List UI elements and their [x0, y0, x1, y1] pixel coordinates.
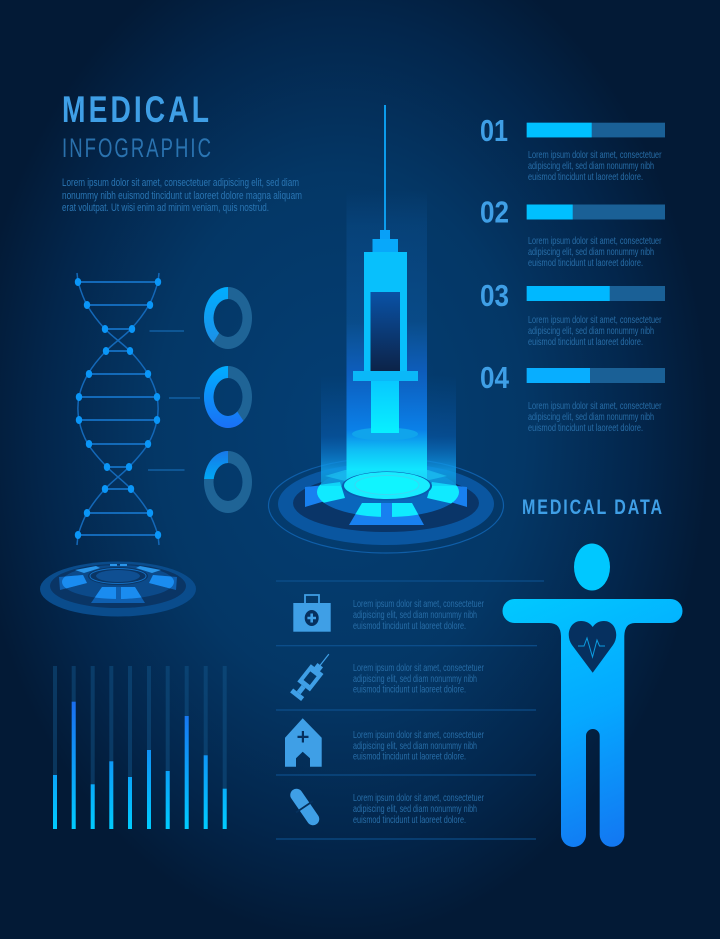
numbered list [480, 113, 665, 434]
row 4 text [353, 793, 484, 826]
plunger [371, 381, 399, 433]
row 3 text: euismod tincidunt ut laoreet dolore. [353, 752, 466, 762]
icon: first aid kit [293, 595, 331, 632]
platform core [325, 470, 447, 500]
item 03: euismod tincidunt ut laoreet dolore. [528, 337, 643, 348]
heart [569, 621, 616, 673]
row 2 text [353, 663, 484, 696]
item 02: Lorem ipsum dolor sit amet, consectetuer [528, 236, 662, 247]
item 03: 03 [480, 278, 509, 313]
needle [384, 105, 386, 231]
row 1 text [353, 599, 484, 632]
syringe window [370, 292, 400, 371]
title: INFOGRAPHIC [62, 133, 213, 163]
item 03 [480, 278, 665, 348]
title: MEDICAL [62, 89, 212, 130]
row 3 text [353, 730, 484, 762]
item 01: euismod tincidunt ut laoreet dolore. [528, 172, 643, 183]
title [62, 89, 213, 163]
human figure [502, 544, 682, 847]
item 02: adipiscing elit, sed diam nonummy nibh [528, 247, 654, 258]
syringe [352, 105, 418, 440]
row 1 text: euismod tincidunt ut laoreet dolore. [353, 621, 466, 632]
icon: syringe [289, 649, 335, 702]
item 03: Lorem ipsum dolor sit amet, consectetuer [528, 315, 662, 326]
syringe tip [380, 230, 390, 240]
main hologram platform [268, 458, 504, 553]
donut chart 3 [204, 451, 252, 513]
intro text block [62, 177, 302, 214]
item 02: euismod tincidunt ut laoreet dolore. [528, 258, 643, 269]
small hologram platform [40, 562, 196, 616]
row 2 text: Lorem ipsum dolor sit amet, consectetuer [353, 663, 484, 674]
row 4 text: Lorem ipsum dolor sit amet, consectetuer [353, 793, 484, 804]
bar chart [53, 666, 227, 829]
row 3 text: adipiscing elit, sed diam nonummy nibh [353, 741, 477, 752]
DNA connector lines [148, 331, 200, 470]
medical data heading: MEDICAL DATA [522, 496, 664, 519]
item 03: adipiscing elit, sed diam nonummy nibh [528, 326, 654, 337]
row 4 text: adipiscing elit, sed diam nonummy nibh [353, 804, 477, 815]
item 02 [480, 194, 665, 269]
head [574, 544, 610, 590]
row 1 text: Lorem ipsum dolor sit amet, consectetuer [353, 599, 484, 610]
item 04: Lorem ipsum dolor sit amet, consectetuer [528, 401, 662, 412]
row 2 text: euismod tincidunt ut laoreet dolore. [353, 684, 466, 696]
item 01: 01 [480, 113, 508, 148]
intro text block: Lorem ipsum dolor sit amet, consectetuer adipiscing elit, sed diam [62, 177, 299, 189]
icon: capsule [296, 795, 313, 819]
intro text block: erat volutpat. Ut wisi enim ad minim veniam, quis nostrud. [62, 202, 269, 214]
flange [353, 371, 418, 381]
DNA helix [75, 273, 161, 545]
item 04: euismod tincidunt ut laoreet dolore. [528, 423, 643, 434]
row 1 text: adipiscing elit, sed diam nonummy nibh [353, 610, 477, 621]
donut chart 1 [204, 287, 252, 349]
item 01 [480, 113, 665, 183]
row 4 text: euismod tincidunt ut laoreet dolore. [353, 815, 466, 826]
item 02: 02 [480, 194, 509, 229]
item 01: Lorem ipsum dolor sit amet, consectetuer [528, 150, 662, 161]
item 04 [480, 360, 665, 434]
item 01: adipiscing elit, sed diam nonummy nibh [528, 161, 654, 172]
item 04: 04 [480, 360, 510, 395]
row 2 text: adipiscing elit, sed diam nonummy nibh [353, 674, 477, 685]
syringe barrel [364, 252, 407, 371]
disc under plunger [352, 428, 418, 440]
heartbeat line [578, 638, 605, 657]
syringe collar [372, 239, 398, 252]
row 3 text: Lorem ipsum dolor sit amet, consectetuer [353, 730, 484, 741]
light beams [321, 190, 456, 486]
icon list [276, 581, 544, 839]
item 04: adipiscing elit, sed diam nonummy nibh [528, 412, 654, 423]
donut chart 2 [204, 366, 252, 428]
intro text block: nonummy nibh euismod tincidunt ut laoreet dolore magna aliquam [62, 190, 302, 202]
icon: hospital [285, 718, 322, 767]
body [502, 599, 682, 847]
